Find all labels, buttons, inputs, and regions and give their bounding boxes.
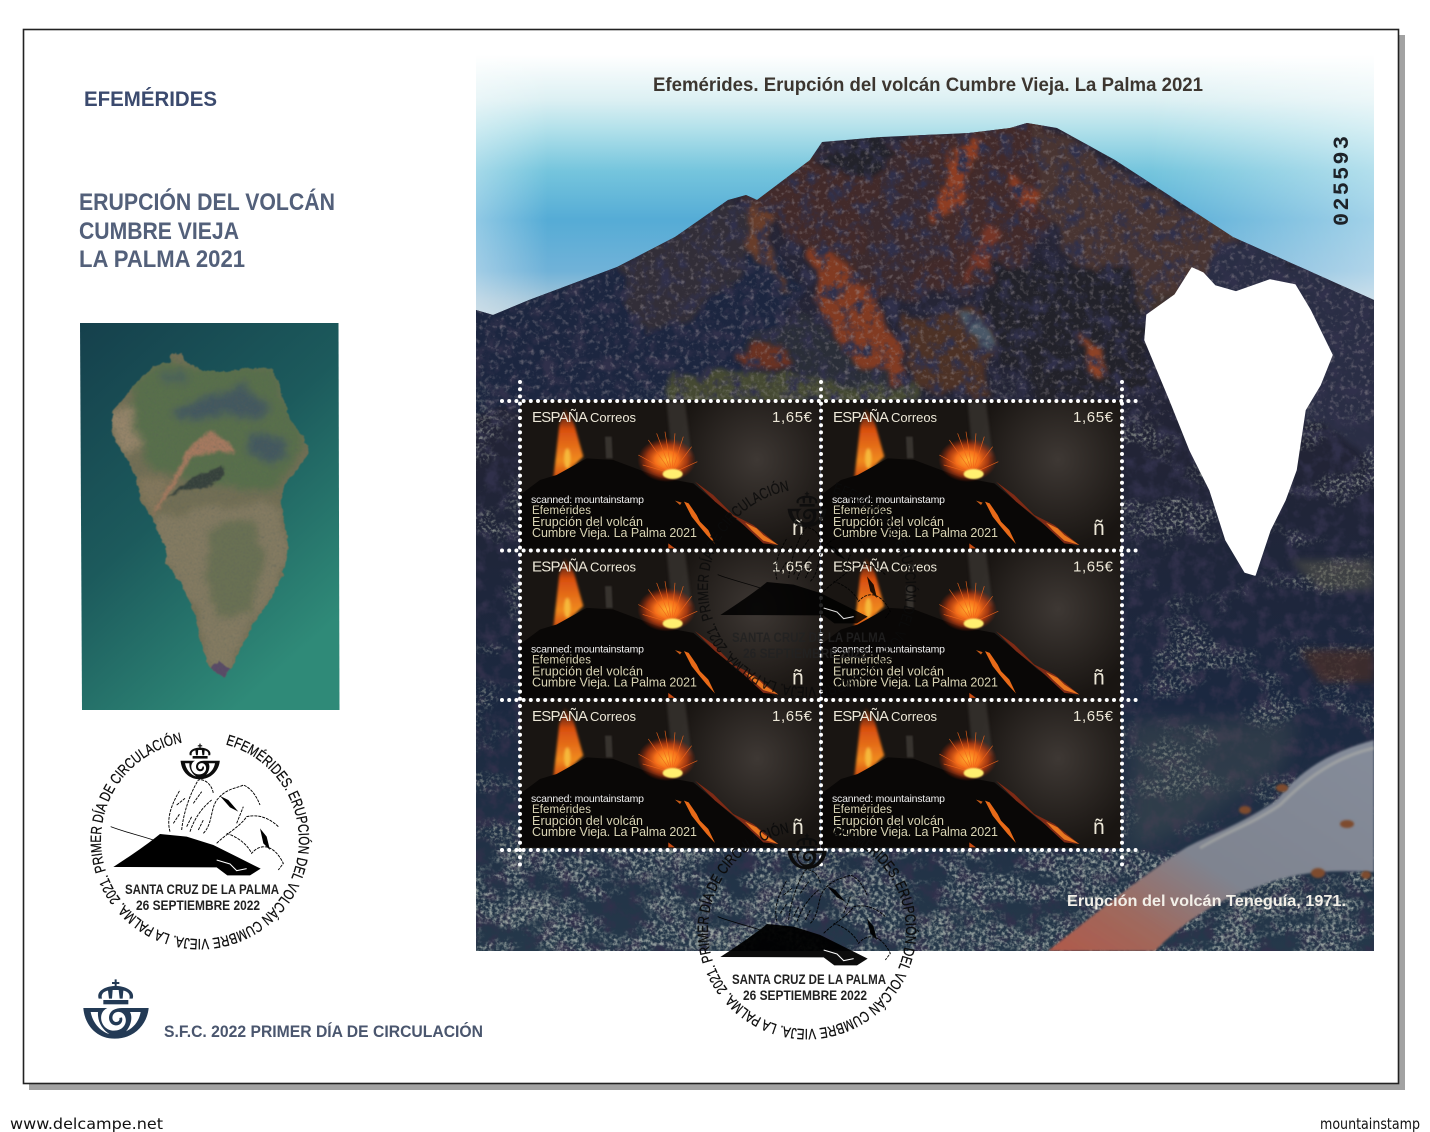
stamp 1 [520,400,820,549]
stamp 4 [821,549,1121,699]
stamp 3 [520,549,820,699]
die-cut island silhouette [1145,268,1332,575]
heading: issue title: CUMBRE VIEJA [79,218,239,245]
stamp 1: ESPAÑA [532,409,588,426]
sky [476,55,1374,325]
postmark on sheet lower: 26 SEPTIEMBRE 2022 [743,988,867,1003]
stamp panel [520,400,1121,848]
stamp 5: Correos [590,709,636,724]
stamp 6: Erupción del volcán [833,814,944,828]
heading: issue title [79,188,335,273]
stamp 1: Cumbre Vieja. La Palma 2021 [532,526,697,540]
stamp 1: Erupción del volcán [532,515,643,529]
souvenir sheet [460,55,1390,951]
postmark on envelope: EFEMÉRIDES. ERUPCIÓN DEL VOLCÁN CUMBRE VIEJA. LA PALMA. 2021. PRIMER DÍA DE CIRCULACIÓN [90,732,312,950]
stamp 5: ESPAÑA [532,708,588,725]
heading: efemérides: EFEMÉRIDES [84,88,217,111]
perforations [502,382,1140,868]
stamp 6: Cumbre Vieja. La Palma 2021 [833,825,998,839]
heading: issue title: LA PALMA 2021 [79,246,245,273]
stamp 5 [520,699,820,848]
stamp 6: scanned: mountainstamp [832,793,945,805]
stamp 6: ESPAÑA [833,708,889,725]
stamp 1: ñ [792,517,804,540]
stamp 2: Correos [891,410,938,425]
stamp 3: ESPAÑA [532,558,588,576]
stamp 5: 1,65€ [772,708,813,725]
stamp 2: 1,65€ [1073,409,1114,426]
stamp 6 [821,699,1121,848]
footer label: S.F.C. 2022 PRIMER DÍA DE CIRCULACIÓN [164,1022,483,1041]
stamp 3: Efemérides [532,654,591,666]
stamp 6: ñ [1093,816,1105,839]
stamp 4: 1,65€ [1073,558,1114,576]
stamp 4: Cumbre Vieja. La Palma 2021 [833,676,998,690]
postmark on sheet upper: EFEMÉRIDES. ERUPCIÓN DEL VOLCÁN CUMBRE VIEJA. LA PALMA. 2021. PRIMER DÍA DE CIRCULACIÓN [698,480,919,698]
road at lower right [1048,740,1374,951]
stamp 6: Efemérides [833,804,892,816]
stamp 1: scanned: mountainstamp [531,494,644,506]
stamp 1: Efemérides [532,505,591,517]
stamp 5: Erupción del volcán [532,814,643,828]
postmark on envelope: SANTA CRUZ DE LA PALMA [125,882,279,897]
stamp 4: Erupción del volcán [833,664,944,678]
stamp 3: 1,65€ [772,558,813,576]
postmark on sheet lower: SANTA CRUZ DE LA PALMA [732,972,886,987]
satellite image: La Palma island [80,323,340,710]
stamp 5: scanned: mountainstamp [531,793,644,805]
stamp 6: 1,65€ [1073,708,1114,725]
stamp 4: scanned: mountainstamp [832,644,945,656]
stamp 6: Correos [891,709,938,724]
stamp 2: Cumbre Vieja. La Palma 2021 [833,526,998,540]
stamp 5: Efemérides [532,804,591,816]
stamp 3: ñ [792,666,804,690]
stamp 1: Correos [590,410,636,425]
stamp 2: Erupción del volcán [833,515,944,529]
stamp 1: 1,65€ [772,409,813,426]
stamp 5: Cumbre Vieja. La Palma 2021 [532,825,697,839]
island land [103,350,317,683]
postmark on sheet upper: SANTA CRUZ DE LA PALMA [732,630,886,645]
stamp 2: Efemérides [833,505,892,517]
stamp 3: Erupción del volcán [532,664,643,678]
stamp 3: Correos [590,560,636,574]
serial number: 025593 [1330,136,1355,226]
stamp 2 [821,400,1121,549]
stamp 2: ESPAÑA [833,409,889,426]
stamp 4: Correos [891,560,938,574]
postmark on envelope: 26 SEPTIEMBRE 2022 [136,898,260,913]
stamp 5: ñ [792,816,804,839]
stamp 4: Efemérides [833,654,892,666]
volcano photo: mountain and lava ground [460,120,1390,951]
stamp 4: ESPAÑA [833,558,889,576]
stamp 3: Cumbre Vieja. La Palma 2021 [532,676,697,690]
stamp 2: ñ [1093,517,1105,540]
photo caption: Erupción del volcán Teneguía, 1971. [1067,893,1346,910]
heading: issue title: ERUPCIÓN DEL VOLCÁN [79,188,335,216]
stamp 3: scanned: mountainstamp [531,644,644,656]
postmark on sheet upper: 26 SEPTIEMBRE 2022 [743,646,867,661]
sheet title: Efemérides. Erupción del volcán Cumbre Vieja. La Palma 2021 [653,75,1203,96]
stamp 4: ñ [1093,666,1105,690]
icon: Correos post horn logo [83,979,149,1039]
postmark on sheet lower: EFEMÉRIDES. ERUPCIÓN DEL VOLCÁN CUMBRE VIEJA. LA PALMA. 2021. PRIMER DÍA DE CIRCULACIÓN [697,822,920,1040]
stamp 2: scanned: mountainstamp [832,494,945,506]
